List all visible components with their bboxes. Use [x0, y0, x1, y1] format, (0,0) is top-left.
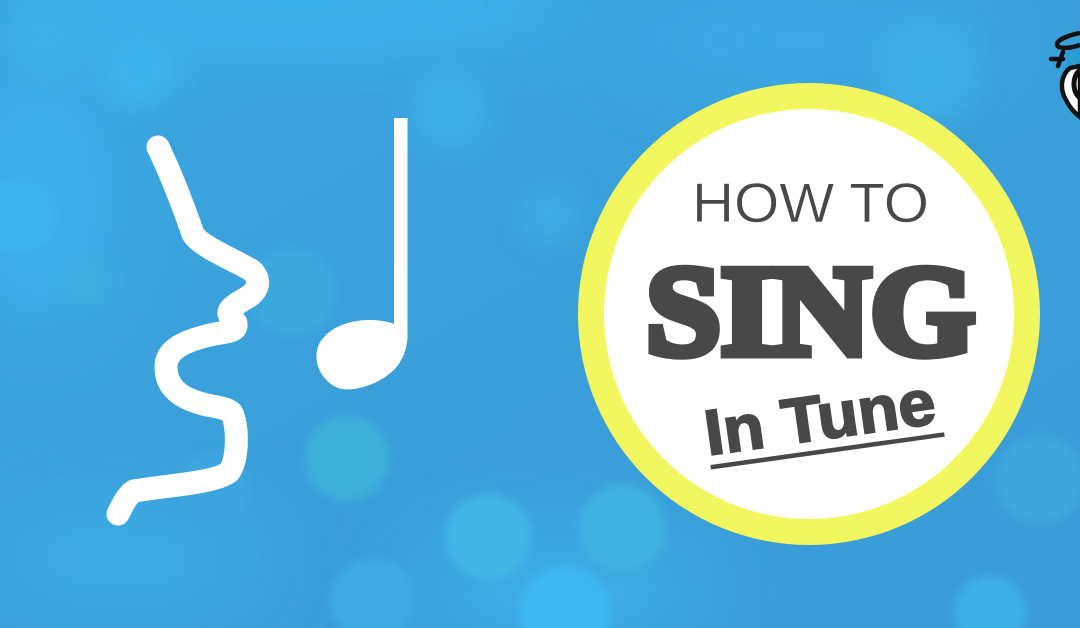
- heading: SING: SING: [646, 240, 975, 382]
- heading: HOW TO: HOW TO: [692, 171, 929, 234]
- icon: music note: [316, 118, 408, 389]
- icon: cropped mascot: [1051, 33, 1080, 117]
- subheading: In Tune with underline: In Tune: [700, 366, 940, 469]
- badge: yellow ring and white circle: [578, 83, 1040, 545]
- icon: singing face profile: [118, 147, 258, 514]
